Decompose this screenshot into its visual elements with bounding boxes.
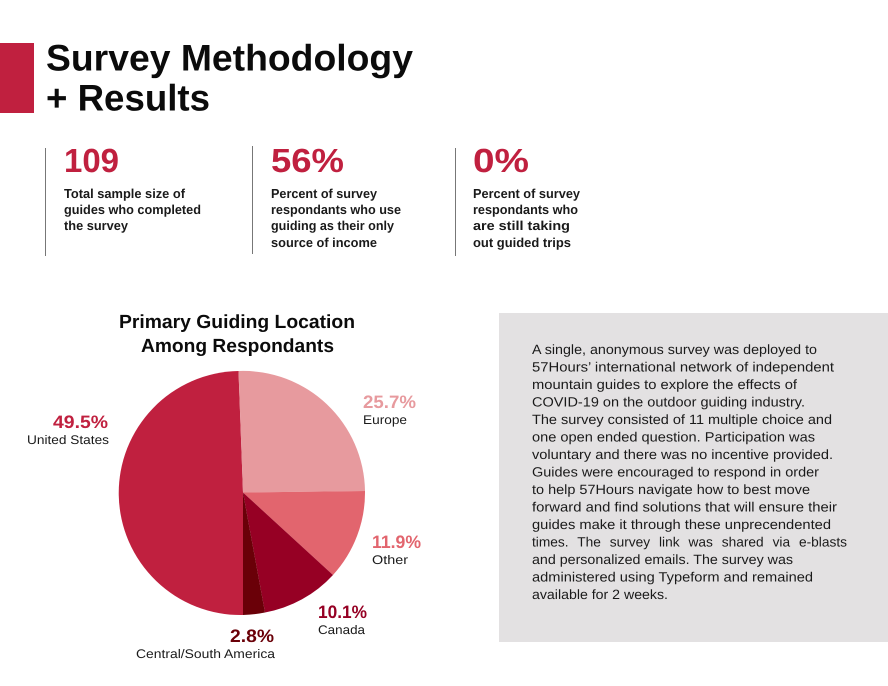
stat: still taking trips: Percent of survey [473,186,581,201]
stat: guiding as only income: 56% [271,143,344,180]
label: Other: Other [372,553,408,567]
panel: methodology text: one open ended question. Participation was [532,430,815,444]
panel: methodology text [499,313,888,642]
label: Other [372,532,421,567]
chart title: Among Respondants [141,336,334,357]
label: Canada: 10.1% [318,602,367,622]
stat: still taking trips: out guided trips [473,235,571,250]
panel: methodology text: 57Hours’ international network of independent [532,360,834,374]
label: Central/South America [136,626,275,661]
panel: methodology text: available for 2 weeks. [532,587,668,602]
title: + Results [46,78,210,118]
stat: guiding as only income: Percent of survey [271,186,378,201]
stat: total sample size: Total sample size of [64,186,186,201]
pie chart [119,371,365,615]
stat: still taking trips: 0% [473,143,529,180]
label: Canada [318,602,367,637]
panel: methodology text: COVID-19 on the outdoor guiding industry. [532,394,805,410]
stat: total sample size [45,143,201,256]
panel: methodology text: The survey consisted of 11 multiple choice and [532,412,832,427]
panel: methodology text: and personalized emails. The survey was [532,552,793,567]
panel: methodology text: times. The survey link was shared via e-blasts [532,534,847,550]
accent block [0,43,34,113]
chart title [119,312,355,357]
stat: total sample size: guides who completed [64,202,201,217]
panel: methodology text: A single, anonymous survey was deployed to [532,342,817,357]
stat: total sample size: 109 [64,143,119,180]
stat: guiding as only income: guiding as their only [271,218,395,233]
title [46,38,413,118]
label: Europe: Europe [363,413,407,427]
label: United States [27,412,109,447]
stat: still taking trips [455,143,581,256]
label: United States: United States [27,433,109,447]
label: Other: 11.9% [372,532,421,552]
label: United States: 49.5% [53,412,108,432]
panel: methodology text: administered using Typeform and remained [532,570,813,584]
stat: guiding as only income: source of income [271,235,377,250]
stat: guiding as only income: respondants who use [271,202,401,217]
panel: methodology text: forward and find solutions that will ensure their [532,500,838,514]
panel: methodology text: Guides were encouraged to respond in order [532,464,820,480]
chart title: Primary Guiding Location [119,312,355,333]
stat: still taking trips: respondants who [473,202,578,217]
label: Europe: 25.7% [363,392,416,412]
panel: methodology text: to help 57Hours navigate how to best move [532,482,810,497]
stat: still taking trips: are still taking [473,218,570,233]
label: Central/South America: Central/South America [136,647,275,661]
panel: methodology text: voluntary and there was no incentive provided. [532,447,833,462]
label: Canada: Canada [318,623,365,637]
label: Europe [363,392,416,427]
title: Survey Methodology [46,38,413,78]
stat: guiding as only income [252,143,401,254]
panel: methodology text: guides make it through these unprecendented [532,517,831,532]
stat: total sample size: the survey [64,218,129,233]
label: Central/South America: 2.8% [230,626,274,646]
panel: methodology text: mountain guides to explore the effects of [532,377,797,392]
